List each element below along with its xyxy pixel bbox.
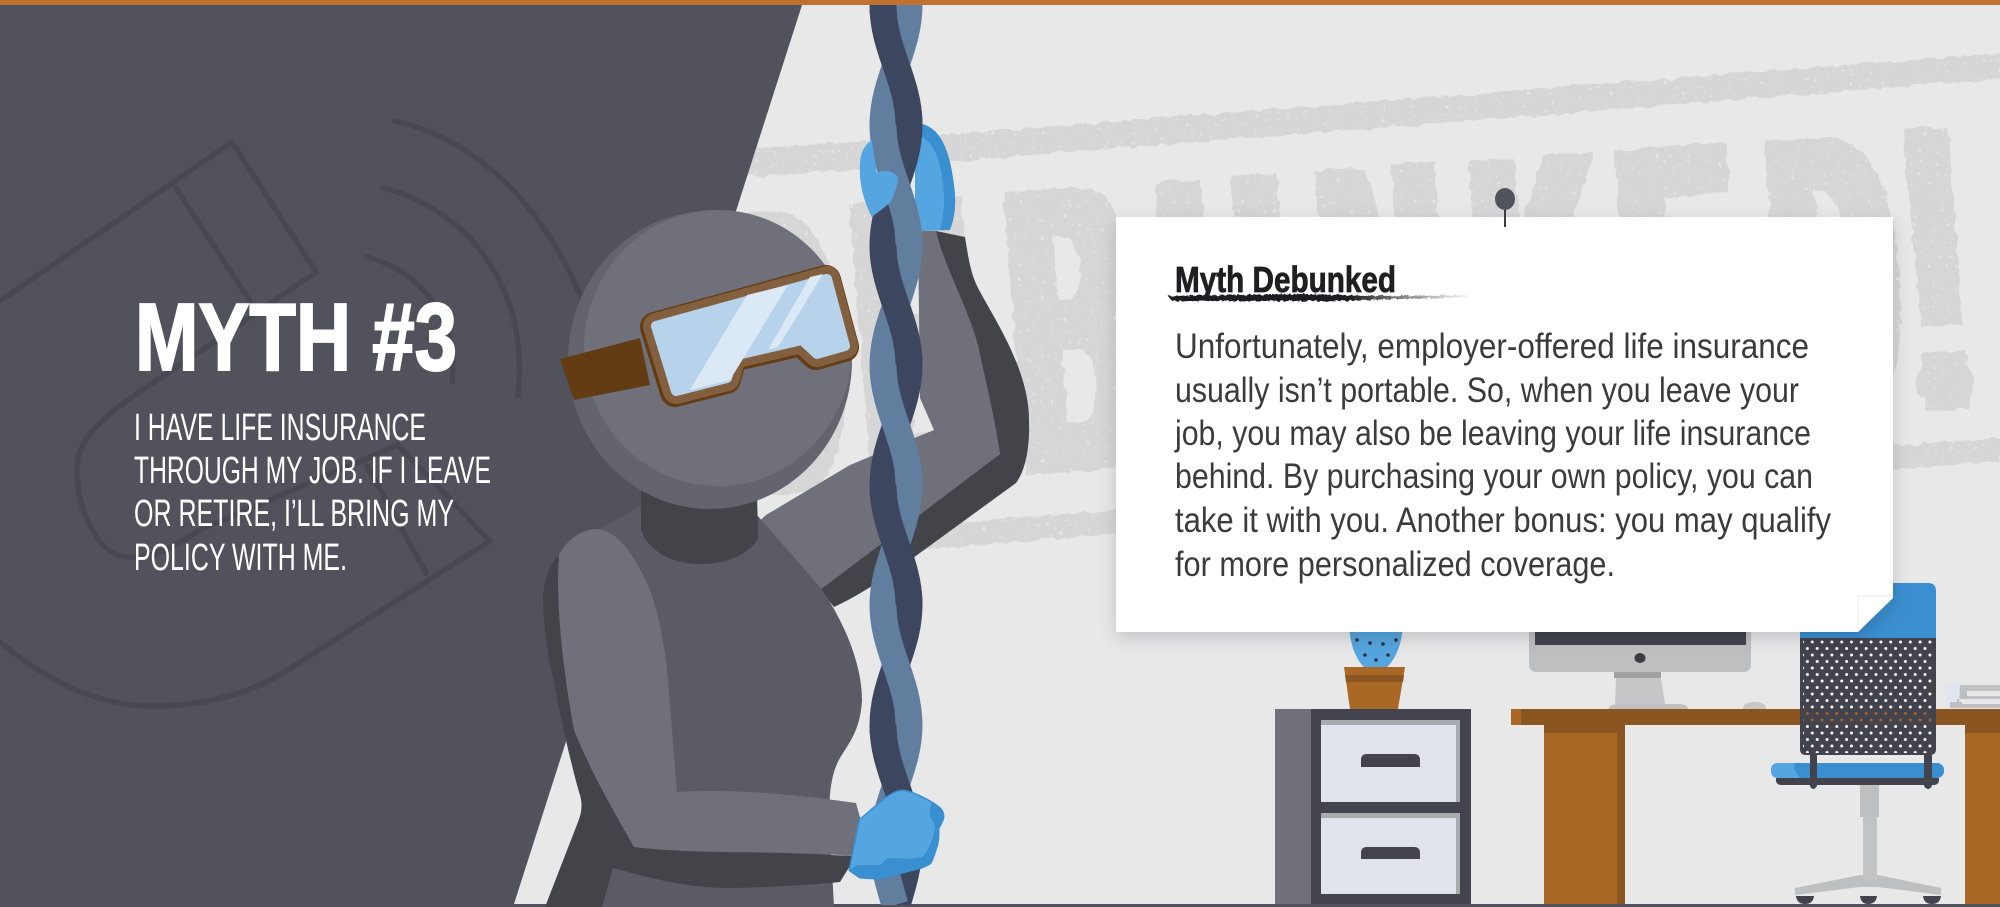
debunked stamp watermark: E [1607,57,1754,517]
floor line [0,904,2000,907]
debunked stamp watermark: B [996,98,1153,559]
debunked stamp watermark: N [1307,76,1464,537]
body text: behind. By purchasing your own policy, you can [1175,457,1813,496]
dark left panel [0,5,802,907]
myth statement text: OR RETIRE, I’LL BRING MY [134,493,454,535]
body text: job, you may also be leaving your life insurance [1174,414,1811,453]
computer monitor [1529,625,1766,709]
torso [600,506,862,907]
brush underline [1168,294,1471,301]
stacked books [1945,684,2000,708]
icon: magnet outline with signal arcs [0,121,590,706]
desk [1511,709,2000,904]
body text [1174,327,1831,584]
twisted rope [883,5,909,905]
upper glove back [915,124,955,231]
figure holding rope [543,5,1029,907]
body text: Unfortunately, employer-offered life insurance [1175,327,1809,366]
body text: for more personalized coverage. [1175,545,1615,584]
heading: Myth Debunked [1175,259,1396,300]
debunked stamp watermark: ! [1891,40,1983,496]
lowered arm [558,529,861,856]
cactus in pot [1344,625,1405,709]
myth statement text: THROUGH MY JOB. IF I LEAVE [134,450,491,492]
debunked stamp watermark: D [702,121,859,582]
debunked stamp watermark [702,40,2000,582]
panel: myth debunked card [1116,217,1893,632]
lowered arm shadow [543,555,856,907]
debunked stamp watermark: D [1757,47,1914,508]
myth statement text [134,407,491,579]
filing cabinet [1275,709,1471,904]
myth statement text: POLICY WITH ME. [134,537,347,579]
office furniture [1275,583,2000,904]
neck [641,490,758,564]
lower glove [850,791,943,878]
upper glove front [860,140,898,217]
title: MYTH #3 [135,284,457,391]
debunked stamp watermark: E [842,111,989,571]
icon: push pin [1495,188,1515,227]
goggles [560,274,845,400]
myth statement text: I HAVE LIFE INSURANCE [134,407,426,449]
debunked stamp watermark: U [1149,88,1306,549]
top accent bar [0,0,2000,5]
body text: take it with you. Another bonus: you may qualify [1175,501,1831,540]
debunked stamp watermark: K [1461,67,1618,528]
head [568,210,852,509]
body text: usually isn’t portable. So, when you leave your [1175,371,1799,410]
raised arm [750,231,1029,607]
office chair [1771,583,1944,904]
